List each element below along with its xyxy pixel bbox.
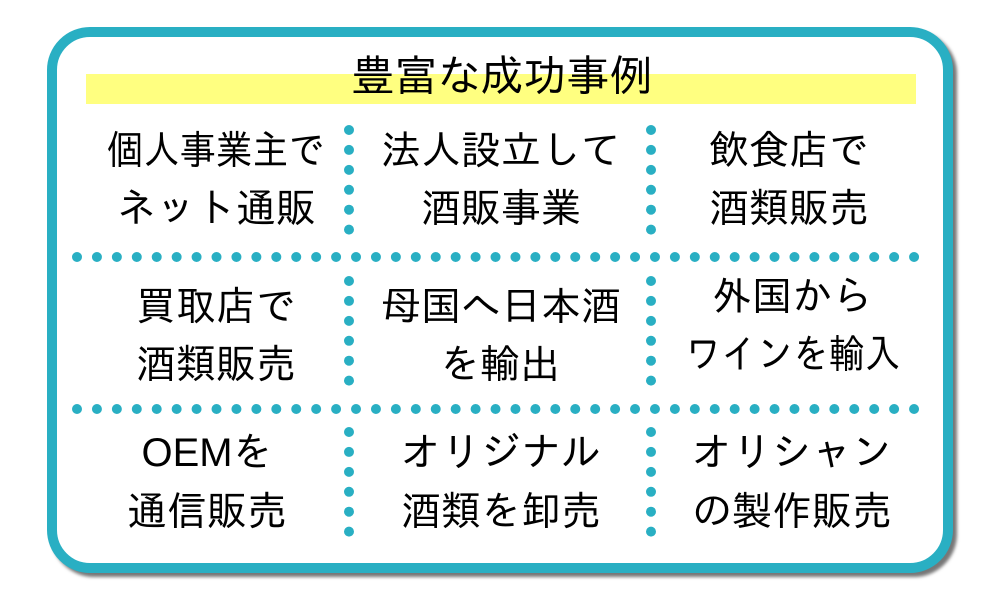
item: OEMを通信販売: OEMを bbox=[142, 431, 272, 475]
item: 飲食店で酒類販売: 飲食店で bbox=[709, 129, 869, 173]
item: オリジナル酒類を卸売: オリジナル bbox=[401, 431, 601, 475]
item: OEMを通信販売 bbox=[127, 431, 287, 534]
item: オリジナル酒類を卸売: 酒類を卸売 bbox=[401, 490, 601, 534]
item: 法人設立して酒販事業: 酒販事業 bbox=[421, 187, 581, 231]
item: 飲食店で酒類販売: 酒類販売 bbox=[709, 187, 869, 231]
item: オリジナル酒類を卸売 bbox=[401, 431, 601, 534]
item: オリシャンの製作販売 bbox=[692, 431, 892, 534]
item: 外国からワインを輸入: 外国から bbox=[712, 275, 872, 319]
dotted dividers bbox=[77, 130, 917, 537]
item: 母国へ日本酒を輸出: を輸出 bbox=[440, 343, 560, 387]
item: 個人事業主でネット通販 bbox=[107, 129, 325, 231]
item: 母国へ日本酒を輸出: 母国へ日本酒 bbox=[381, 285, 621, 329]
item: 買取店で酒類販売: 買取店で bbox=[136, 285, 296, 329]
item: OEMを通信販売: 通信販売 bbox=[127, 490, 287, 534]
item: 法人設立して酒販事業 bbox=[381, 129, 621, 231]
title highlight bbox=[86, 74, 916, 104]
item: オリシャンの製作販売: オリシャン bbox=[692, 431, 892, 475]
item: 法人設立して酒販事業: 法人設立して bbox=[381, 129, 621, 173]
item: 買取店で酒類販売 bbox=[136, 285, 296, 387]
item: 母国へ日本酒を輸出 bbox=[381, 285, 621, 387]
item: オリシャンの製作販売: の製作販売 bbox=[692, 490, 892, 534]
item: 個人事業主でネット通販: 個人事業主で bbox=[107, 129, 325, 173]
item: 個人事業主でネット通販: ネット通販 bbox=[116, 187, 316, 231]
item: 外国からワインを輸入: ワインを輸入 bbox=[686, 333, 900, 377]
title: 豊富な成功事例 bbox=[352, 53, 652, 101]
item: 買取店で酒類販売: 酒類販売 bbox=[136, 343, 296, 387]
item: 飲食店で酒類販売 bbox=[709, 129, 869, 231]
item: 外国からワインを輸入 bbox=[686, 275, 900, 377]
